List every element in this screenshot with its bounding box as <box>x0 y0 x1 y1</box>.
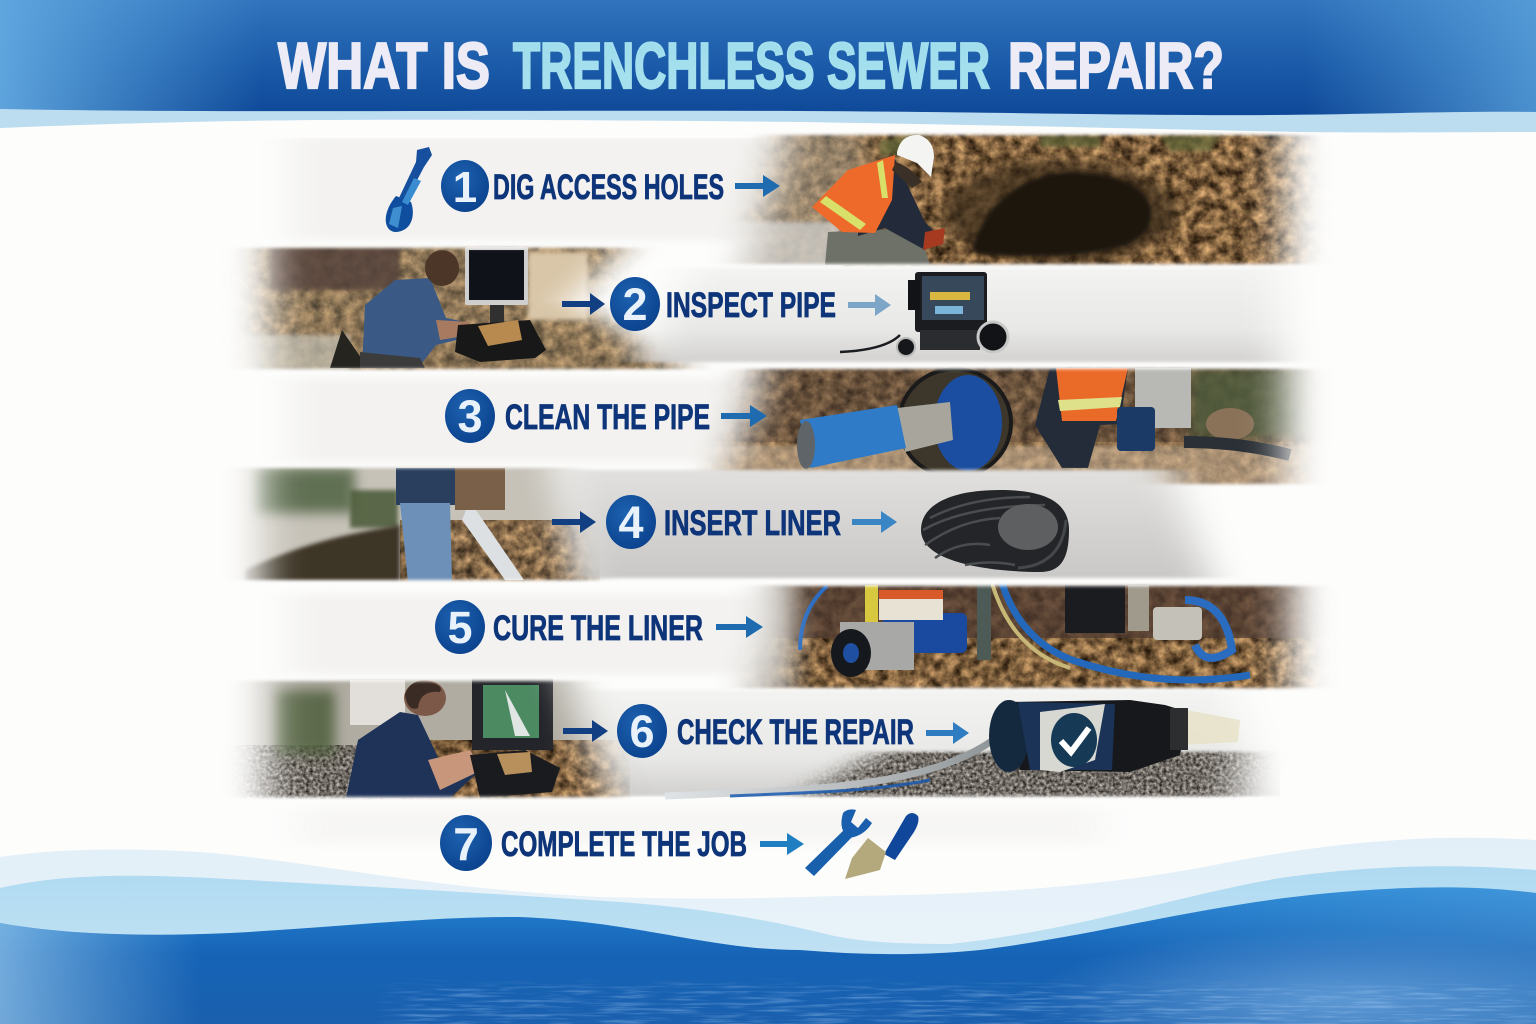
badge 6 <box>617 704 667 758</box>
label 6: CHECK THE REPAIR <box>677 713 914 752</box>
badge 4: 4 <box>618 497 644 548</box>
photo strip 3: pipe cleaning machine <box>696 366 1318 486</box>
technician and monitor <box>346 678 560 798</box>
label 2: INSPECT PIPE <box>666 286 836 325</box>
footer waves <box>0 838 1536 1024</box>
photo strip 2: technician at inspection console <box>238 246 707 372</box>
badge 1 <box>441 160 489 212</box>
header wave <box>0 109 1536 136</box>
photo strip 4: liner being inserted <box>240 466 606 582</box>
camera head with check mark <box>989 700 1240 772</box>
photo strip 5: curing equipment <box>730 583 1324 691</box>
row background bands <box>290 136 1100 844</box>
technician <box>330 247 546 368</box>
step 3 <box>445 389 767 443</box>
badge 7: 7 <box>453 818 479 870</box>
photo strip 6: technician checking monitor <box>235 678 630 800</box>
badge 3: 3 <box>457 391 483 442</box>
crew member in orange vest <box>1035 368 1128 468</box>
step 2 <box>562 272 1008 356</box>
badge 2: 2 <box>622 279 648 330</box>
photo strip 2 right: pale ground <box>614 269 1298 364</box>
badge 3 <box>445 389 495 443</box>
step 6 <box>563 704 969 758</box>
icon: inspection cart <box>840 272 1008 356</box>
badge 4 <box>606 495 656 549</box>
arrow 7 <box>760 833 804 855</box>
label 3: CLEAN THE PIPE <box>505 398 710 437</box>
label 4: INSERT LINER <box>664 504 841 543</box>
title: REPAIR? <box>1008 29 1224 102</box>
step 1 <box>441 160 780 212</box>
step 5 <box>435 600 763 654</box>
worker <box>812 135 945 265</box>
step 4 <box>552 495 897 549</box>
photo strip 4 right: road and coiled liner <box>540 468 1228 580</box>
blue hoses and pump <box>800 582 1250 680</box>
arrow 3 <box>721 405 767 427</box>
curing cart <box>831 585 967 677</box>
arrow 1 <box>735 175 780 197</box>
badge 1: 1 <box>453 163 477 212</box>
arrow 6 left <box>563 720 608 742</box>
label 1: DIG ACCESS HOLES <box>493 168 724 207</box>
badge 2 <box>610 277 660 331</box>
hose <box>665 735 1000 796</box>
coiled liner <box>921 490 1069 572</box>
label 5: CURE THE LINER <box>493 609 703 648</box>
arrow 4 left <box>552 511 596 533</box>
label 7: COMPLETE THE JOB <box>501 825 747 864</box>
photo strip 6 right: ground <box>560 685 1280 797</box>
photo strip 1: worker and dug access hole <box>723 132 1318 266</box>
arrow 5 <box>716 616 763 638</box>
photo strip 6 right: camera head on gravel <box>665 700 1300 800</box>
arrow 2 left <box>562 293 605 315</box>
icon: shovel <box>386 147 432 232</box>
icon: tools <box>805 809 918 879</box>
worker holding liner <box>396 468 524 582</box>
inspection console <box>455 247 546 362</box>
cleaning jet pipe and reel <box>797 369 1011 477</box>
arrow 2 right <box>848 294 891 316</box>
badge 6: 6 <box>629 706 655 757</box>
badge 5: 5 <box>447 602 473 653</box>
title: WHAT IS <box>278 29 490 102</box>
badge 7 <box>440 815 492 871</box>
header band <box>0 0 1536 138</box>
arrow 4 right <box>852 511 897 533</box>
badge 5 <box>435 600 485 654</box>
title: TRENCHLESS SEWER <box>513 29 990 102</box>
arrow 6 right <box>926 722 969 744</box>
step 7 <box>440 809 918 879</box>
